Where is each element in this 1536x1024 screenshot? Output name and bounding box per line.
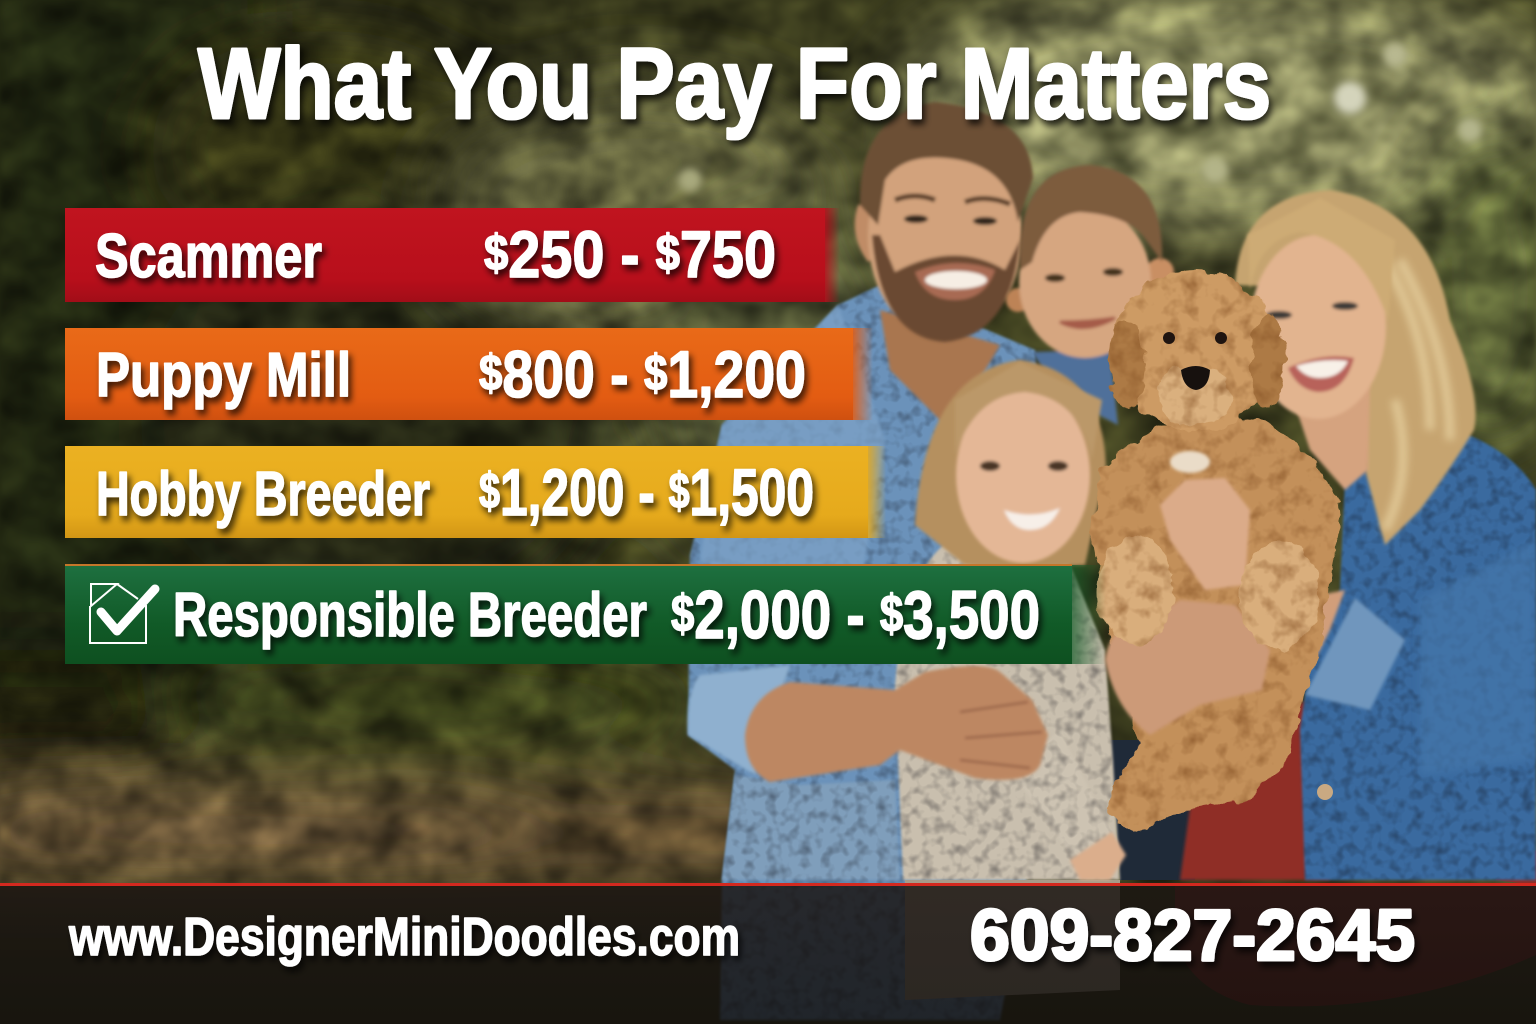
price: scammer: 750: [680, 217, 776, 291]
price: puppy mill: 800 -: [502, 337, 644, 411]
price: hobby breeder: 1,500: [690, 455, 814, 529]
panel: hobby breeder price bar: [65, 446, 886, 538]
girl: [895, 360, 1126, 1000]
price: scammer: $: [656, 225, 680, 281]
man: [688, 102, 1060, 1020]
label: puppy mill: Puppy Mill: [96, 341, 351, 410]
label: hobby breeder: Hobby Breeder: [96, 460, 430, 529]
woman lower hand: [1105, 600, 1270, 735]
woman: [1110, 190, 1536, 1006]
price: scammer: 250 -: [508, 217, 656, 291]
woman hand on puppy: [1160, 478, 1250, 590]
price: hobby breeder: $: [669, 463, 690, 519]
price: responsible breeder: 2,000 -: [694, 577, 880, 653]
panel: responsible breeder price bar: [65, 564, 1106, 664]
title: What You Pay For Matters: [198, 28, 1271, 140]
price: hobby breeder: $: [479, 463, 500, 519]
price: responsible breeder: $: [671, 585, 694, 643]
man forearm and hand: [745, 666, 1048, 782]
price: scammer: $: [484, 225, 508, 281]
footer band: [0, 883, 1536, 1024]
label: scammer: Scammer: [95, 222, 322, 291]
man head: [855, 102, 1033, 342]
family photo illustration: [688, 102, 1536, 1020]
price: responsible breeder: 3,500: [903, 577, 1040, 653]
panel: scammer price bar: [65, 208, 840, 302]
price: puppy mill: $: [479, 345, 503, 401]
website url: www.DesignerMiniDoodles.com: [68, 907, 740, 967]
label: responsible breeder: Responsible Breeder: [173, 581, 647, 650]
panel: puppy mill price bar: [65, 328, 873, 420]
boy: [1006, 165, 1174, 425]
puppy body: [1090, 417, 1339, 835]
price: puppy mill: 1,200: [667, 337, 806, 411]
price: puppy mill: $: [644, 345, 668, 401]
price: responsible breeder: $: [880, 585, 903, 643]
price: hobby breeder: 1,200 -: [500, 455, 669, 529]
phone number: 609-827-2645: [970, 896, 1415, 976]
puppy head and paws: [1097, 270, 1320, 650]
icon: check box: [90, 584, 155, 643]
